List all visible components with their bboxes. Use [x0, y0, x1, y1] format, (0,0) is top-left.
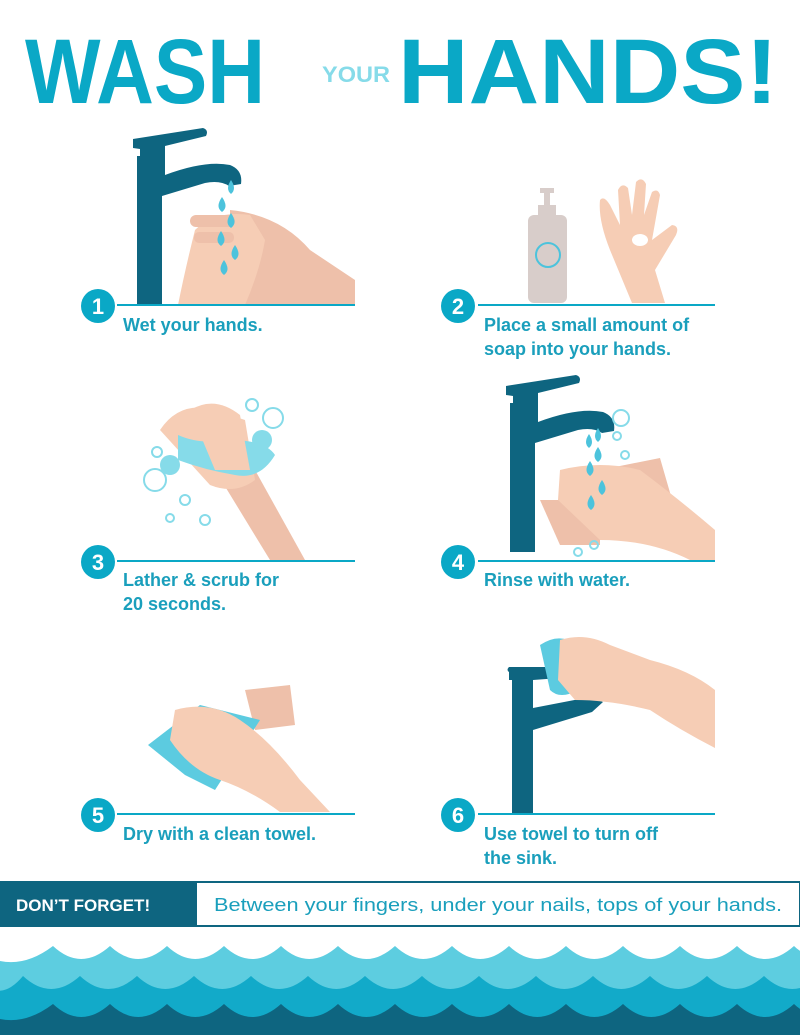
icon: open hand: [600, 179, 677, 303]
number 3: 3: [92, 550, 104, 575]
icon: soap bottle: [528, 188, 567, 303]
panel: step 4: [441, 375, 715, 590]
panel: step 3: [81, 399, 355, 614]
icon: hands step 1: [178, 210, 355, 305]
number 2: 2: [452, 294, 464, 319]
number 1: [81, 289, 115, 323]
title: WASH: [25, 21, 265, 123]
text: step 6: the sink.: [484, 848, 557, 868]
text: step 2: soap into your hands.: [484, 339, 671, 359]
title: YOUR: [322, 62, 390, 87]
callout: don't forget: [0, 882, 800, 926]
number 5: [81, 798, 115, 832]
text: step 1: Wet your hands.: [123, 315, 263, 335]
number 1: 1: [92, 294, 104, 319]
panel: step 5: [81, 685, 355, 844]
icon: hands step 4: [540, 458, 715, 560]
panel: step 6: [441, 637, 715, 868]
text: step 6: Use towel to turn off: [484, 824, 659, 844]
number 4: [441, 545, 475, 579]
text: step 2: Place a small amount of: [484, 315, 690, 335]
number 3: [81, 545, 115, 579]
icon: towel hands: [148, 685, 330, 812]
icon: lather hands: [144, 399, 305, 560]
panel: step 2: [441, 179, 715, 359]
icon: faucet 4: [506, 375, 614, 552]
title: HANDS!: [398, 21, 778, 123]
number 6: 6: [452, 803, 464, 828]
number 6: [441, 798, 475, 832]
callout: don't forget: Between your fingers, under your nails, tops of your hands.: [214, 895, 782, 915]
number 4: 4: [452, 550, 465, 575]
title: [25, 21, 778, 123]
icon: faucet 6: [508, 667, 603, 814]
icon: drops 1: [218, 180, 238, 275]
icon: faucet 1: [133, 128, 241, 305]
panel: step 1: [81, 128, 355, 335]
callout: don't forget: DON’T FORGET!: [16, 896, 150, 915]
text: step 4: Rinse with water.: [484, 570, 630, 590]
waves: [0, 946, 800, 1035]
number 5: 5: [92, 803, 104, 828]
icon: towel and hand 6: [540, 637, 715, 748]
text: step 5: Dry with a clean towel.: [123, 824, 316, 844]
icon: drops 4: [586, 428, 606, 510]
text: step 3: Lather & scrub for: [123, 570, 279, 590]
number 2: [441, 289, 475, 323]
text: step 3: 20 seconds.: [123, 594, 226, 614]
